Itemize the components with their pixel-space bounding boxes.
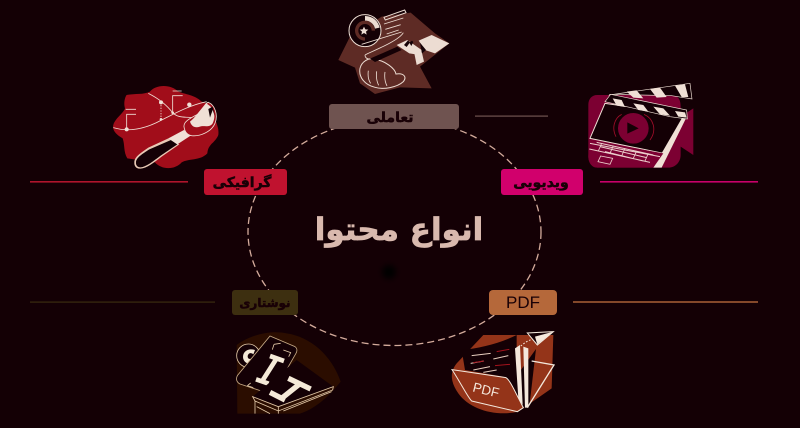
label: written	[232, 290, 298, 315]
icon: interactive hand	[338, 10, 449, 94]
connector: written	[30, 302, 215, 303]
connector: video	[600, 181, 758, 183]
label: PDF	[489, 290, 557, 315]
label: video	[501, 169, 583, 195]
icon: PDF folder: PDF	[471, 380, 501, 401]
label: PDF: PDF	[506, 293, 540, 312]
label: interactive: تعاملی	[367, 110, 413, 126]
centre shadow dot	[382, 265, 396, 279]
connector: PDF	[573, 301, 758, 303]
title: انواع محتوا	[315, 212, 483, 248]
icon: PDF folder	[452, 332, 554, 413]
label: video: ویدیویی	[513, 175, 569, 191]
label: interactive	[329, 104, 459, 129]
label: graphic: گرافیکی	[213, 174, 272, 191]
icon: graphic brush	[113, 86, 218, 169]
label: written: نوشتاری	[239, 296, 291, 311]
icon: written text	[237, 332, 341, 414]
icon: video clapperboard	[588, 83, 693, 168]
dashed circle	[248, 118, 541, 346]
connector: interactive	[475, 116, 548, 117]
connector: graphic	[30, 181, 188, 183]
label: graphic	[204, 169, 287, 195]
